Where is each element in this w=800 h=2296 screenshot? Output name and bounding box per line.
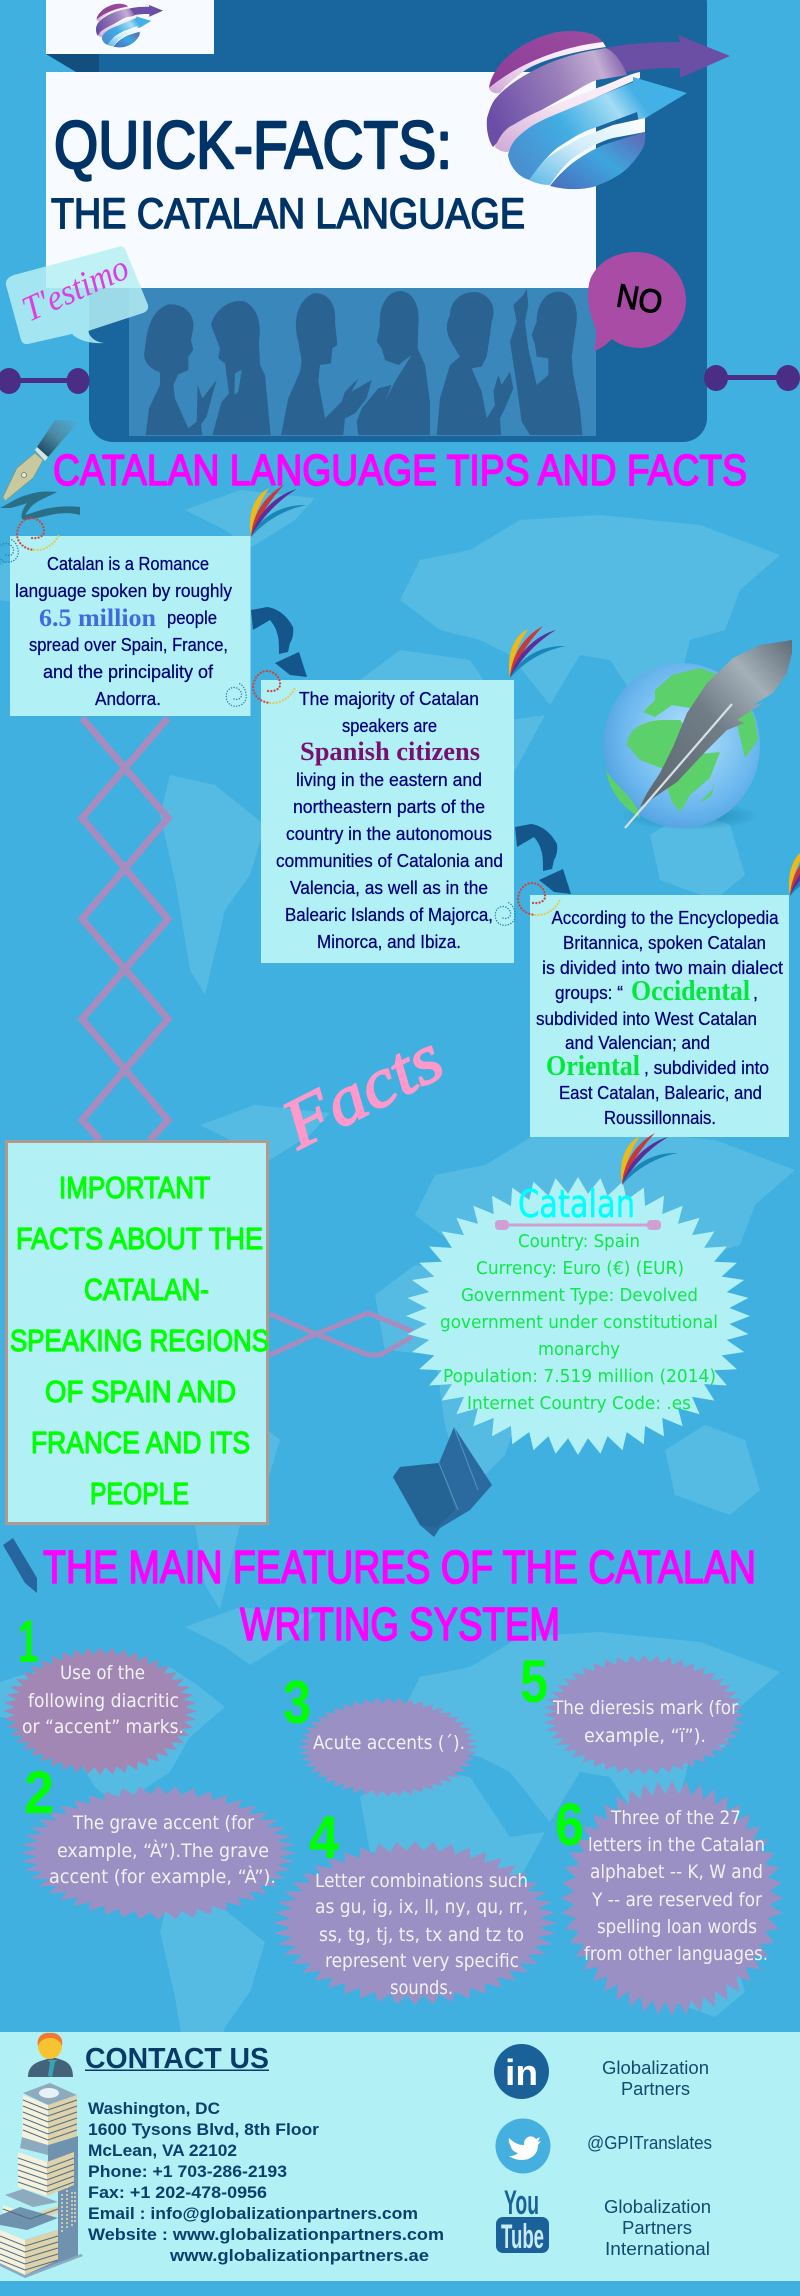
country facts: [440, 1231, 718, 1414]
fact 2 text: Balearic Islands of Majorca,: [285, 905, 493, 925]
header panel: [46, 0, 730, 442]
contact panel: [0, 2032, 800, 2281]
fact 2 text: northeastern parts of the: [293, 797, 485, 817]
fact 1 text: Andorra.: [95, 689, 161, 709]
fact box 2: [261, 680, 514, 963]
icon: YouTube: Tube: [501, 2218, 544, 2256]
feature 2 text: The grave accent (for: [72, 1812, 254, 1834]
fact 2 text: The majority of Catalan: [299, 689, 479, 709]
feature 4 text: as gu, ig, ix, ll, ny, qu, rr,: [315, 1896, 528, 1918]
feature 6 text: [584, 1807, 768, 1965]
fact box 3: [530, 895, 789, 1137]
fact 3 text: Occidental: [631, 976, 750, 1007]
plume 4: [621, 1133, 678, 1185]
feature 4 text: sounds.: [390, 1977, 453, 1999]
feature 3: [283, 1669, 488, 1802]
feature 6 text: Three of the 27: [610, 1807, 741, 1829]
dotted swirls: [0, 518, 560, 925]
plume 2: [509, 626, 566, 678]
panel heading text: FRANCE AND ITS: [31, 1425, 250, 1460]
feature 2 text: [49, 1812, 276, 1888]
horizontal lattice connector: [270, 1313, 412, 1355]
fact 3 text: Oriental: [546, 1051, 640, 1082]
fact 2 text: [276, 689, 503, 952]
Twitter label: @GPITranslates: [587, 2133, 712, 2153]
address block: Fax: +1 202-478-0956: [88, 2183, 267, 2202]
icon: fountain pen nib: [3, 420, 80, 501]
contact heading: CONTACT US: [85, 2043, 269, 2075]
fact 3 text: East Catalan, Balearic, and: [559, 1083, 762, 1103]
LinkedIn label: [602, 2058, 709, 2099]
panel heading text: SPEAKING REGIONS: [10, 1323, 269, 1358]
silhouettes of people talking: [129, 288, 596, 436]
hook arrow 2: [515, 824, 571, 894]
fact 2 text: Spanish citizens: [300, 737, 480, 766]
speech bubble: T'estimo: [6, 246, 148, 344]
icon: pen: [3, 1538, 37, 1593]
fact 1 text: 6.5 million: [39, 605, 156, 632]
feather: [640, 640, 792, 807]
world map background: [0, 490, 795, 2112]
country facts: Internet Country Code: .es: [467, 1393, 691, 1414]
feature 6: [549, 1767, 795, 2029]
globe shadow: [620, 802, 760, 830]
feature 5 text: example, “ï”).: [584, 1725, 706, 1747]
fact 3 text: According to the Encyclopedia: [552, 908, 779, 928]
speech bubble: NO: [588, 252, 686, 351]
feature 6 text: letters in the Catalan: [588, 1834, 765, 1856]
address block: Website : www.globalizationpartners.com: [88, 2225, 444, 2244]
tab fold: [46, 54, 99, 72]
country facts: Population: 7.519 million (2014): [443, 1366, 716, 1387]
feature 2 text: example, “À”).The grave: [57, 1839, 269, 1862]
plume 3: [789, 844, 800, 896]
feature 6 text: Y -- are reserved for: [591, 1889, 762, 1911]
connector right: [704, 365, 800, 391]
feature 4 text: [315, 1870, 528, 1999]
feature 1: [0, 1608, 207, 1782]
feature 5: [520, 1648, 756, 1781]
country facts: government under constitutional: [440, 1312, 718, 1333]
fact 1 text: [15, 554, 232, 709]
panel heading text: PEOPLE: [90, 1476, 189, 1511]
country facts: Currency: Euro (€) (EUR): [476, 1258, 684, 1279]
address block: Phone: +1 703-286-2193: [88, 2162, 287, 2181]
address block: McLean, VA 22102: [88, 2141, 237, 2160]
icon: LinkedIn: in: [505, 2052, 538, 2093]
logo icon small: [96, 4, 163, 47]
fact 3 text: , subdivided into: [644, 1058, 769, 1078]
YouTube label: Globalization: [604, 2197, 711, 2217]
T'estimo text: T'estimo: [16, 247, 135, 329]
starburst: Catalan card: [387, 1162, 769, 1470]
feature 1 text: or “accent” marks.: [22, 1716, 184, 1738]
icon: globe with feather: [603, 640, 792, 830]
feature 2: [5, 1759, 311, 1927]
logo tab: [46, 0, 214, 54]
feature 2 text: accent (for example, “À”).: [49, 1865, 276, 1888]
YouTube label: [604, 2197, 711, 2259]
number 6: 6: [555, 1791, 584, 1858]
address block: Email : info@globalizationpartners.com: [88, 2204, 418, 2223]
icon: open book: [393, 1427, 492, 1537]
feature 5 text: [552, 1697, 738, 1747]
fact 1 text: spread over Spain, France,: [29, 635, 228, 655]
fact 1 text: people: [167, 608, 217, 628]
fact 2 text: living in the eastern and: [296, 770, 482, 790]
icon: LinkedIn: [494, 2044, 549, 2099]
fact 3 text: and Valencian; and: [565, 1033, 710, 1053]
panel heading text: [10, 1170, 269, 1511]
LinkedIn label: Globalization: [602, 2058, 709, 2078]
subtitle: the Catalan language: THE CATALAN LANGUAGE: [51, 190, 525, 238]
feature 4 text: represent very specific: [325, 1950, 519, 1972]
fact 1 text: and the principality of: [43, 662, 214, 682]
number 2: 2: [24, 1759, 54, 1826]
plume 1: [250, 485, 307, 537]
feature 4 text: Letter combinations such: [315, 1870, 528, 1892]
title box: [46, 72, 596, 288]
icon: YouTube: [496, 2184, 549, 2256]
feature 6 text: spelling loan words: [597, 1916, 757, 1938]
feature 4 text: ss, tg, tj, ts, tx and tz to: [319, 1924, 524, 1946]
fact 1 text: Catalan is a Romance: [47, 554, 209, 574]
number 1: 1: [18, 1608, 38, 1675]
number 4: 4: [309, 1804, 340, 1871]
number 5: 5: [520, 1648, 548, 1715]
panel heading text: IMPORTANT: [59, 1170, 210, 1205]
feature 3 text: Acute accents (´).: [313, 1732, 465, 1754]
panel: important facts: [6, 1142, 269, 1524]
NO text: NO: [614, 276, 666, 321]
hook arrow 1: [251, 607, 307, 677]
heading: main features: WRITING SYSTEM: [240, 1598, 560, 1650]
fact 3 text: Britannica, spoken Catalan: [563, 933, 766, 953]
fact 2 text: communities of Catalonia and: [276, 851, 503, 871]
fact 3 text: [536, 908, 783, 1128]
feature 6 text: from other languages.: [584, 1943, 768, 1965]
fact 3 text: groups: “: [555, 983, 623, 1003]
fact 1 text: language spoken by roughly: [15, 581, 232, 601]
fact 3 text: ,: [753, 983, 758, 1003]
fact 3 text: subdivided into West Catalan: [536, 1009, 757, 1029]
Facts lettering: Facts: [269, 1019, 455, 1165]
panel heading text: OF SPAIN AND: [45, 1374, 236, 1409]
country facts: Country: Spain: [518, 1231, 640, 1252]
fact 3 text: is divided into two main dialect: [542, 958, 783, 978]
Catalan title: Catalan: [518, 1182, 635, 1226]
fact 2 text: country in the autonomous: [286, 824, 492, 844]
feature 1 text: following diacritic: [28, 1690, 179, 1712]
panel heading text: FACTS ABOUT THE: [16, 1221, 263, 1256]
title: quick-facts: QUICK-FACTS:: [54, 108, 452, 183]
address block: [88, 2099, 444, 2265]
country facts: monarchy: [538, 1339, 620, 1360]
fact 2 text: Valencia, as well as in the: [290, 878, 488, 898]
number 3: 3: [283, 1669, 311, 1736]
YouTube label: International: [605, 2239, 710, 2259]
fact box 1: [10, 536, 250, 716]
heading: main features: [43, 1541, 756, 1650]
icon: skyscraper: [0, 2083, 83, 2278]
country facts: Government Type: Devolved: [461, 1285, 698, 1306]
feature 4: [258, 1804, 572, 2014]
address block: www.globalizationpartners.ae: [169, 2246, 429, 2265]
address block: Washington, DC: [88, 2099, 220, 2118]
feature 1 text: Use of the: [60, 1662, 145, 1684]
connector left: [0, 368, 90, 394]
panel heading text: CATALAN-: [84, 1272, 209, 1307]
feature 6 text: alphabet -- K, W and: [590, 1861, 763, 1883]
fact 3 text: Roussillonnais.: [604, 1108, 716, 1128]
icon: YouTube: You: [504, 2184, 539, 2222]
fact 2 text: speakers are: [342, 716, 437, 736]
dark blue header card: [89, 0, 707, 442]
lattice vertical: [82, 718, 168, 1140]
icon: Twitter: [496, 2118, 550, 2174]
decorative divider: [495, 1220, 661, 1230]
logo sphere with arrows: [487, 31, 730, 189]
feature 5 text: The dieresis mark (for: [552, 1697, 738, 1719]
LinkedIn label: Partners: [621, 2079, 690, 2099]
address block: 1600 Tysons Blvd, 8th Floor: [88, 2120, 319, 2139]
icon: businessman: [28, 2033, 73, 2077]
YouTube label: Partners: [622, 2218, 692, 2238]
feature 1 text: [22, 1662, 184, 1738]
fact 2 text: Minorca, and Ibiza.: [317, 932, 461, 952]
icon: ink swoosh: [0, 491, 80, 520]
